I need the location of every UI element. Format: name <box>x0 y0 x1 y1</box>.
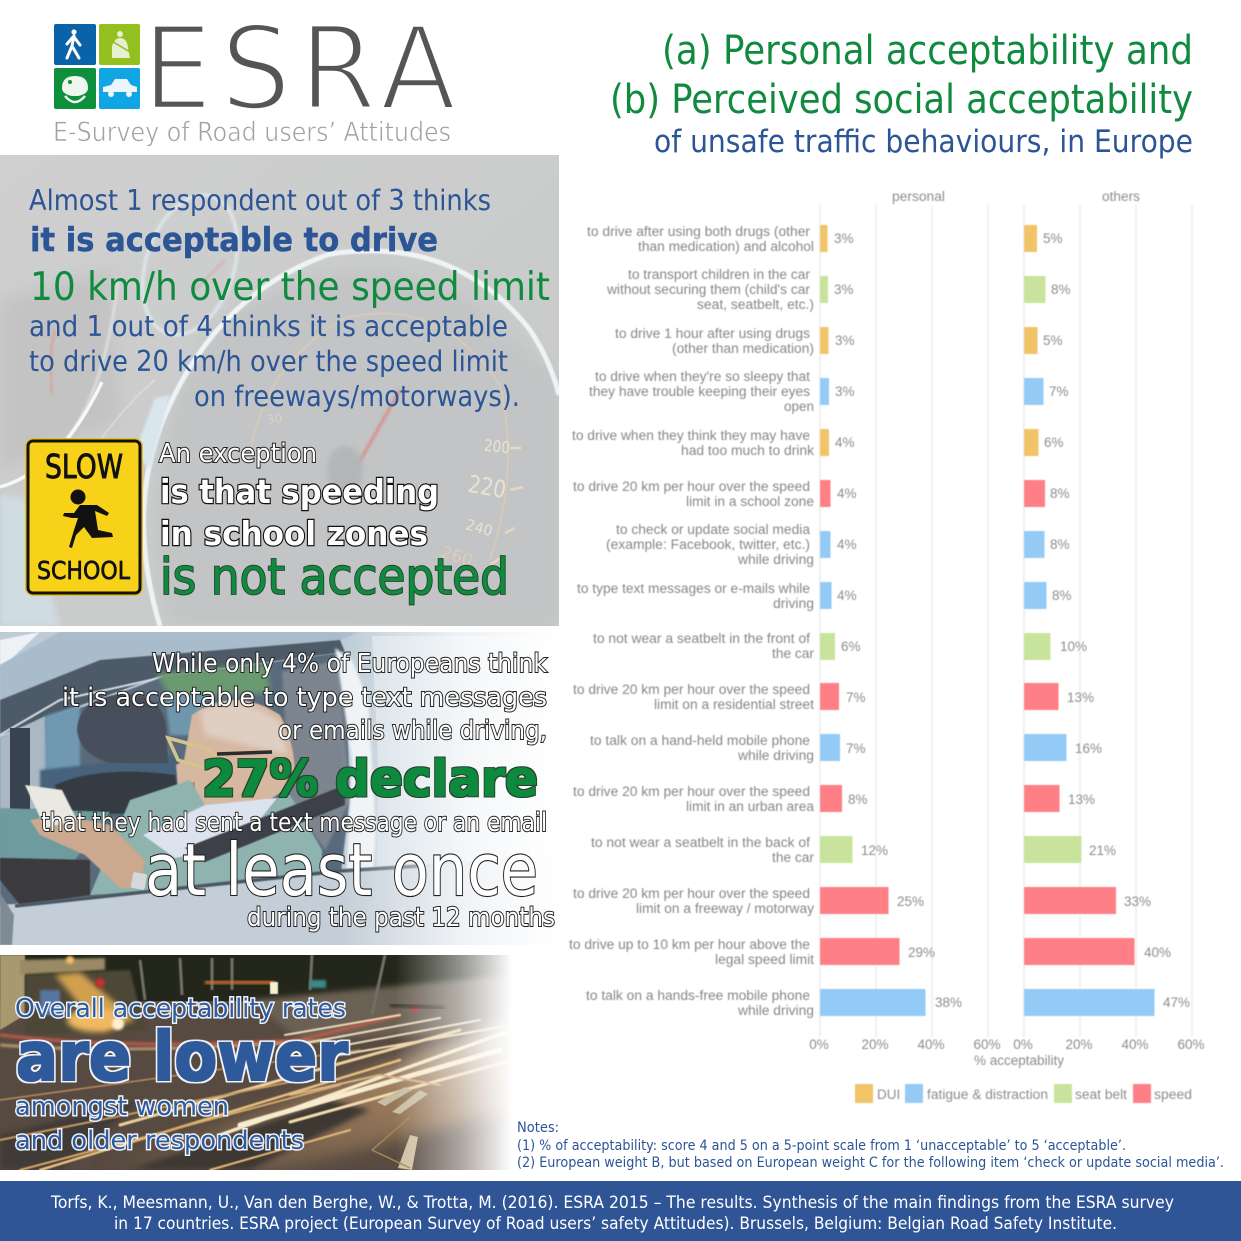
icon: car tile <box>99 68 140 109</box>
legend: fatigue & distraction <box>927 1087 1048 1102</box>
row 8: driving <box>773 596 814 611</box>
axis labels: 40% <box>917 1037 945 1052</box>
row 13: to not wear a seatbelt in the back of <box>591 835 810 850</box>
row 4: 3% <box>835 384 855 399</box>
text block: texting finding: during the past 12 months <box>247 903 555 933</box>
text block: school zones exception: is that speeding <box>160 472 439 511</box>
row 15: 29% <box>908 945 935 960</box>
row 1: 5% <box>1043 231 1063 246</box>
panel: texting while driving <box>0 632 559 945</box>
text block: school zones exception: in school zones <box>160 514 428 553</box>
row 10: to drive 20 km per hour over the speed <box>573 682 810 697</box>
row 9: 6% <box>841 639 861 654</box>
text block: lower acceptability: Overall acceptability rates <box>15 994 346 1024</box>
legend: DUI <box>877 1087 900 1102</box>
text block: lower acceptability: and older respondents <box>15 1126 304 1156</box>
row 9: the car <box>772 646 815 661</box>
row 3: (other than medication) <box>672 341 814 356</box>
row 10: limit on a residential street <box>654 697 814 712</box>
row 16: to talk on a hands-free mobile phone <box>586 988 810 1003</box>
axis labels: 20% <box>1065 1037 1093 1052</box>
row 4: open <box>784 399 814 414</box>
row 8: 8% <box>1052 588 1072 603</box>
wide light band <box>147 1027 502 1170</box>
running child figure <box>63 490 113 548</box>
row 3: 3% <box>835 333 855 348</box>
row 15: to drive up to 10 km per hour above the <box>569 937 810 952</box>
row 7: (example: Facebook, twitter, etc.) <box>606 537 810 552</box>
text block: texting finding: that they had sent a text message or an email <box>41 808 547 838</box>
row 4: 7% <box>1049 384 1069 399</box>
row 2: without securing them (child's car <box>606 282 810 297</box>
light streaks <box>0 1015 512 1170</box>
row 11 <box>590 733 1102 763</box>
logo tagline: E-Survey of Road users’ Attitudes <box>53 117 451 148</box>
text block: speeding finding: 10 km/h over the speed limit <box>30 265 550 310</box>
row 13: 12% <box>861 843 888 858</box>
row 16: 38% <box>935 995 962 1010</box>
text block: lower acceptability: are lower <box>16 1018 348 1097</box>
text block: speeding finding: and 1 out of 4 thinks it is acceptable <box>29 310 508 343</box>
title <box>610 28 1193 160</box>
row 14: to drive 20 km per hour over the speed <box>573 886 810 901</box>
text block: texting finding: at least once <box>145 828 538 912</box>
row 12: to drive 20 km per hour over the speed <box>573 784 810 799</box>
text block: texting finding: it is acceptable to type text messages <box>62 683 547 713</box>
speedometer background: 260 <box>438 542 475 571</box>
row 4: to drive when they're so sleepy that <box>595 369 810 384</box>
legend: seat belt <box>1075 1087 1127 1102</box>
axis labels <box>809 1037 1205 1068</box>
row 16 <box>586 988 1190 1018</box>
text block: school zones exception: is not accepted <box>160 548 509 606</box>
speedometer background: 220 <box>466 470 508 504</box>
text block: texting finding <box>41 649 555 933</box>
axis labels: % acceptability <box>974 1053 1064 1068</box>
icon: slow school sign <box>25 438 143 596</box>
row 1 <box>587 224 1063 254</box>
row 3: 5% <box>1043 333 1063 348</box>
icon: pedestrian tile <box>54 24 96 65</box>
row 11: 16% <box>1075 741 1102 756</box>
row 16: 47% <box>1163 995 1190 1010</box>
notes: Notes: <box>517 1120 559 1136</box>
row 7: while driving <box>737 552 814 567</box>
row 8 <box>577 581 1072 611</box>
row 12 <box>573 784 1095 814</box>
row 9 <box>593 631 1087 661</box>
row 3 <box>615 326 1063 356</box>
row 7: 4% <box>837 537 857 552</box>
footer: citation: Torfs, K., Meesmann, U., Van den Berghe, W., & Trotta, M. (2016). ESRA 2015 – The results. Synthesis of the main findings from the ESRA survey <box>50 1193 1174 1213</box>
speedometer background: 200 <box>483 436 511 457</box>
row 10 <box>573 682 1094 712</box>
notes: (1) % of acceptability: score 4 and 5 on a 5-point scale from 1 ‘unacceptable’ to 5 ‘acceptable’. <box>517 1138 1126 1154</box>
icon: slow school sign: SCHOOL <box>37 556 130 585</box>
logo wordmark: ESRA <box>142 2 464 137</box>
row 10: 13% <box>1067 690 1094 705</box>
row 5: had too much to drink <box>681 443 814 458</box>
row 14: limit on a freeway / motorway <box>636 901 814 916</box>
axis labels: 60% <box>1177 1037 1205 1052</box>
facet headers: others <box>1102 189 1140 204</box>
icon: helmet tile <box>54 68 96 109</box>
row 13 <box>591 835 1116 865</box>
icon: slow school sign: SLOW <box>45 447 123 486</box>
bar chart: acceptability of unsafe behaviours <box>569 189 1205 1103</box>
driver <box>176 700 294 812</box>
row 6: 4% <box>837 486 857 501</box>
panel: acceptability rates <box>0 955 512 1170</box>
row 10: 7% <box>846 690 866 705</box>
text block: school zones exception: An exception <box>159 439 317 469</box>
row 8: 4% <box>837 588 857 603</box>
row 14: 33% <box>1124 894 1151 909</box>
row 2: 8% <box>1051 282 1071 297</box>
car photo background <box>0 632 559 945</box>
cabin interior <box>0 652 350 905</box>
row 12: 13% <box>1068 792 1095 807</box>
icon: seat belt tile <box>99 24 140 65</box>
text block: speeding finding: Almost 1 respondent out of 3 thinks <box>29 184 491 217</box>
row 7 <box>606 522 1070 567</box>
row 9: to not wear a seatbelt in the front of <box>593 631 810 646</box>
speedometer background <box>0 155 559 626</box>
row 12: limit in an urban area <box>686 799 814 814</box>
row 7: 8% <box>1050 537 1070 552</box>
footer: citation: in 17 countries. ESRA project (European Survey of Road users’ safety Attitudes). Brussels, Belgium: Belgian Road Safety Institute. <box>114 1214 1117 1234</box>
text block: texting finding: 27% declare <box>202 750 538 808</box>
row 8: to type text messages or e-mails while <box>577 581 810 596</box>
row 11: while driving <box>737 748 814 763</box>
row 13: 21% <box>1089 843 1116 858</box>
footer: citation <box>0 1181 1241 1241</box>
right pillar and rear window <box>335 648 376 900</box>
legend: speed <box>1154 1087 1192 1102</box>
axis labels: 20% <box>861 1037 889 1052</box>
window seal <box>0 640 345 735</box>
text block: speeding finding: on freeways/motorways). <box>194 380 520 413</box>
row 2: 3% <box>834 282 854 297</box>
row 14: 25% <box>897 894 924 909</box>
text block: lower acceptability <box>15 994 348 1156</box>
row 12: 8% <box>848 792 868 807</box>
text block: speeding finding <box>29 184 550 413</box>
row 11: to talk on a hand-held mobile phone <box>590 733 810 748</box>
row 6: 8% <box>1050 486 1070 501</box>
legend <box>855 1084 1192 1103</box>
row 15: 40% <box>1144 945 1171 960</box>
row 3: to drive 1 hour after using drugs <box>615 326 810 341</box>
road photo background <box>0 955 512 1170</box>
row 9: 10% <box>1060 639 1087 654</box>
arm and hand <box>0 808 110 860</box>
row 5: 4% <box>835 435 855 450</box>
tablet <box>25 785 77 828</box>
row 4 <box>589 369 1069 414</box>
row 2 <box>606 267 1071 312</box>
row 13: the car <box>772 850 815 865</box>
text block: texting finding: While only 4% of Europeans think <box>152 649 547 679</box>
facet headers <box>892 189 1140 204</box>
row 7: to check or update social media <box>616 522 811 537</box>
title: (a) Personal acceptability and <box>662 28 1193 74</box>
row 15 <box>569 937 1171 967</box>
row 5: 6% <box>1044 435 1064 450</box>
text block: speeding finding: to drive 20 km/h over the speed limit <box>29 345 508 378</box>
row 2: seat, seatbelt, etc.) <box>697 297 814 312</box>
text block: school zones exception <box>159 439 509 606</box>
row 6: limit in a school zone <box>686 494 814 509</box>
row 6: to drive 20 km per hour over the speed <box>573 479 810 494</box>
row 5: to drive when they think they may have <box>572 428 810 443</box>
row 14 <box>573 886 1151 916</box>
logo: ESRA <box>53 2 464 148</box>
row 1: 3% <box>834 231 854 246</box>
title: of unsafe traffic behaviours, in Europe <box>654 124 1193 160</box>
row 4: they have trouble keeping their eyes <box>589 384 810 399</box>
axis labels: 0% <box>1013 1037 1033 1052</box>
facet headers: personal <box>892 189 945 204</box>
axis labels: 60% <box>973 1037 1001 1052</box>
car door <box>8 869 419 906</box>
row 15: legal speed limit <box>715 952 814 967</box>
speedometer background: 240 <box>464 516 495 540</box>
row 11: 7% <box>846 741 866 756</box>
text block: texting finding: or emails while driving, <box>278 716 547 746</box>
text block: lower acceptability: amongst women <box>15 1092 229 1122</box>
panel: speeding <box>0 155 559 626</box>
axis labels: 0% <box>809 1037 829 1052</box>
text block: speeding finding: it is acceptable to drive <box>30 220 438 259</box>
row 2: to transport children in the car <box>628 267 811 282</box>
notes <box>517 1120 1224 1171</box>
row 5 <box>572 428 1064 458</box>
row 1: than medication) and alcohol <box>638 239 814 254</box>
row 16: while driving <box>737 1003 814 1018</box>
speedometer background: 30 <box>266 411 283 427</box>
row 6 <box>573 479 1070 509</box>
axis labels: 40% <box>1121 1037 1149 1052</box>
row 1: to drive after using both drugs (other <box>587 224 811 239</box>
